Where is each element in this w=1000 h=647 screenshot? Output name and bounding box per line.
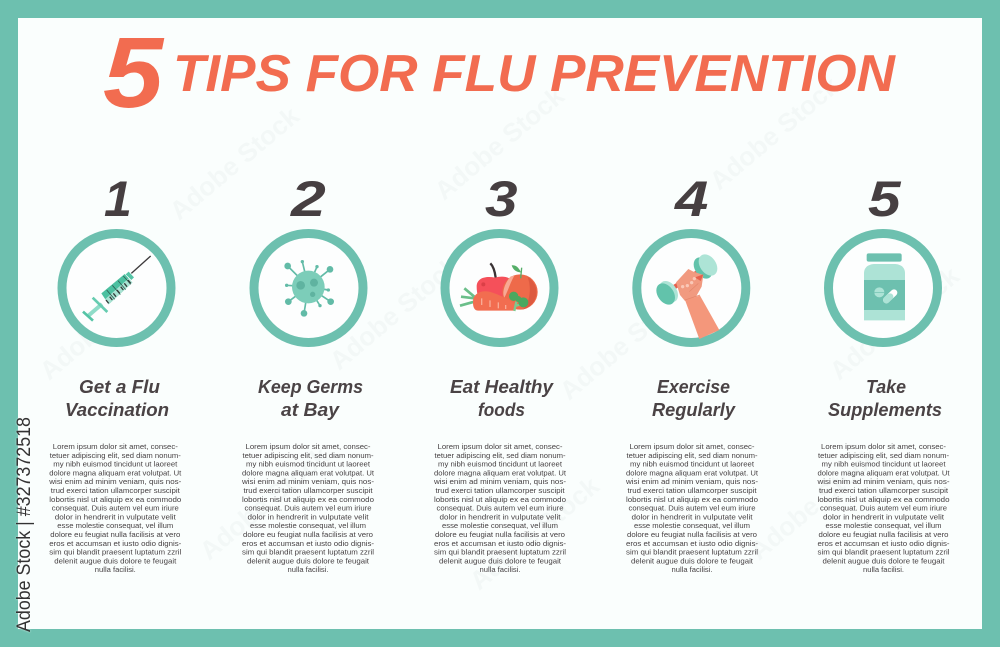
- body text column 4: esse molestie consequat, vel illum: [634, 521, 750, 530]
- body text column 1: esse molestie consequat, vel illum: [57, 521, 173, 530]
- heading 5: Take: [866, 377, 906, 397]
- body text column 2: delenit augue duis dolore te feugait: [247, 556, 370, 565]
- text: Adobe Stock: [164, 100, 305, 226]
- body text column 4: dolor in hendrerit in vulputate velit: [632, 512, 753, 521]
- heading 4: Exercise: [657, 377, 730, 397]
- heading 5: [828, 377, 942, 420]
- text: Adobe Stock: [824, 260, 965, 386]
- circle rings: [62, 234, 938, 342]
- body text column 2: dolor in hendrerit in vulputate velit: [248, 512, 369, 521]
- body text column 3: my nibh euismod tincidunt ut laoreet: [438, 460, 563, 469]
- body text column 1: [48, 442, 182, 574]
- text: Adobe Stock: [34, 260, 175, 386]
- body text column 2: trud exerci tation ullamcorper suscipit: [244, 486, 373, 495]
- body text column 1: dolore eu feugiat nulla facilisis at vero: [50, 530, 180, 539]
- body text column 4: eros et accumsan et iusto odio dignis-: [626, 539, 759, 548]
- icon: dumbbell and arm: [652, 251, 721, 339]
- body text column 2: sim qui blandit praesent luptatum zzril: [242, 548, 374, 557]
- body text column 4: nulla facilisi.: [671, 565, 713, 574]
- body text column 3: lobortis nisl ut aliquip ex ea commodo: [434, 495, 566, 504]
- body text column 4: wisi enim ad minim veniam, quis nos-: [625, 477, 759, 486]
- body text column 4: lobortis nisl ut aliquip ex ea commodo: [626, 495, 758, 504]
- title: [103, 18, 896, 129]
- body text column 1: delenit augue duis dolore te feugait: [54, 556, 177, 565]
- body text column 1: dolore magna aliquam erat volutpat. Ut: [49, 468, 182, 477]
- body text column 5: consequat. Duis autem vel eum iriure: [820, 504, 947, 513]
- body text column 4: delenit augue duis dolore te feugait: [631, 556, 754, 565]
- heading 2: at Bay: [281, 400, 340, 420]
- body text column 5: delenit augue duis dolore te feugait: [822, 556, 945, 565]
- body text column 4: sim qui blandit praesent luptatum zzril: [626, 548, 758, 557]
- body text column 2: [241, 442, 375, 574]
- title text: TIPS FOR FLU PREVENTION: [173, 44, 896, 103]
- heading 3: foods: [478, 400, 525, 420]
- heading 3: [450, 377, 554, 420]
- title number 5: 5: [103, 18, 165, 129]
- body text column 5: [816, 442, 950, 574]
- stock id vertical label: Adobe Stock | #327372518: [12, 417, 34, 632]
- text: Adobe Stock: [429, 80, 570, 206]
- body text column 5: my nibh euismod tincidunt ut laoreet: [821, 460, 946, 469]
- body text column 3: dolor in hendrerit in vulputate velit: [440, 512, 561, 521]
- heading 1: [65, 377, 169, 420]
- body text column 2: dolore magna aliquam erat volutpat. Ut: [242, 468, 375, 477]
- body text column 5: lobortis nisl ut aliquip ex ea commodo: [818, 495, 950, 504]
- body text column 4: Lorem ipsum dolor sit amet, consec-: [630, 442, 755, 451]
- body text column 1: my nibh euismod tincidunt ut laoreet: [53, 460, 178, 469]
- body text column 2: tetuer adipiscing elit, sed diam nonum-: [242, 451, 374, 460]
- body text column 1: Lorem ipsum dolor sit amet, consec-: [53, 442, 178, 451]
- body text column 2: esse molestie consequat, vel illum: [250, 521, 366, 530]
- number 1: 1: [104, 171, 132, 227]
- heading 1: Vaccination: [65, 400, 169, 420]
- body text column 3: delenit augue duis dolore te feugait: [439, 556, 562, 565]
- body text column 1: consequat. Duis autem vel eum iriure: [52, 504, 179, 513]
- body text column 2: consequat. Duis autem vel eum iriure: [244, 504, 372, 513]
- body text column 1: nulla facilisi.: [95, 565, 136, 574]
- body text column 5: Lorem ipsum dolor sit amet, consec-: [821, 442, 947, 451]
- body text column 2: lobortis nisl ut aliquip ex ea commodo: [242, 495, 374, 504]
- number 4: 4: [674, 171, 708, 227]
- icon: virus: [284, 260, 334, 317]
- body text column 5: sim qui blandit praesent luptatum zzril: [818, 548, 950, 557]
- text: Adobe Stock: [194, 440, 335, 566]
- icon: syringe: [83, 256, 151, 321]
- body text column 5: trud exerci tation ullamcorper suscipit: [819, 486, 949, 495]
- number 3: 3: [485, 171, 518, 227]
- heading 3: Eat Healthy: [450, 377, 554, 397]
- body text column 4: consequat. Duis autem vel eum iriure: [628, 504, 756, 513]
- heading 1: Get a Flu: [79, 377, 160, 397]
- body text column 3: trud exerci tation ullamcorper suscipit: [436, 486, 565, 495]
- body text column 1: dolor in hendrerit in vulputate velit: [55, 512, 177, 521]
- body text column 1: tetuer adipiscing elit, sed diam nonum-: [50, 451, 181, 460]
- body text column 3: eros et accumsan et iusto odio dignis-: [434, 539, 567, 548]
- body text column 2: eros et accumsan et iusto odio dignis-: [242, 539, 375, 548]
- body text column 5: esse molestie consequat, vel illum: [826, 521, 942, 530]
- body text column 2: wisi enim ad minim veniam, quis nos-: [241, 477, 375, 486]
- body text column 3: sim qui blandit praesent luptatum zzril: [434, 548, 566, 557]
- text: Adobe Stock: [744, 440, 885, 566]
- heading 4: Regularly: [652, 400, 736, 420]
- body text column 2: dolore eu feugiat nulla facilisis at vero: [243, 530, 373, 539]
- text: Adobe Stock: [324, 250, 465, 376]
- text: Adobe Stock: [464, 470, 605, 596]
- text: Adobe Stock: [704, 70, 845, 196]
- body text column 3: consequat. Duis autem vel eum iriure: [436, 504, 564, 513]
- body text column 3: tetuer adipiscing elit, sed diam nonum-: [434, 451, 566, 460]
- body text column 1: lobortis nisl ut aliquip ex ea commodo: [49, 495, 181, 504]
- heading 5: Supplements: [828, 400, 942, 420]
- body text column 3: nulla facilisi.: [479, 565, 521, 574]
- body text column 3: esse molestie consequat, vel illum: [442, 521, 558, 530]
- body text column 5: dolor in hendrerit in vulputate velit: [823, 512, 945, 521]
- body text column 3: Lorem ipsum dolor sit amet, consec-: [438, 442, 563, 451]
- body text column 1: eros et accumsan et iusto odio dignis-: [49, 539, 182, 548]
- body text column 3: dolore eu feugiat nulla facilisis at vero: [435, 530, 565, 539]
- body text column 5: eros et accumsan et iusto odio dignis-: [818, 539, 950, 548]
- body text column 2: my nibh euismod tincidunt ut laoreet: [246, 460, 371, 469]
- body text column 5: tetuer adipiscing elit, sed diam nonum-: [818, 451, 950, 460]
- numbers: [104, 171, 901, 227]
- heading 2: [258, 377, 363, 420]
- body text column 1: trud exerci tation ullamcorper suscipit: [51, 486, 181, 495]
- heading 2: Keep Germs: [258, 377, 363, 397]
- icon: supplement bottle: [864, 253, 905, 320]
- headings: [65, 377, 942, 420]
- body text column 3: wisi enim ad minim veniam, quis nos-: [433, 477, 567, 486]
- heading 4: [652, 377, 736, 420]
- body text column 3: [433, 442, 567, 574]
- body text column 1: wisi enim ad minim veniam, quis nos-: [48, 477, 182, 486]
- body text column 5: nulla facilisi.: [863, 565, 904, 574]
- body text column 4: tetuer adipiscing elit, sed diam nonum-: [626, 451, 758, 460]
- stock id vertical label: Adobe Stock | #327372518: [12, 417, 34, 632]
- body text column 4: [625, 442, 759, 574]
- body text column 4: dolore magna aliquam erat volutpat. Ut: [626, 468, 759, 477]
- number 2: 2: [290, 171, 326, 227]
- body text column 2: Lorem ipsum dolor sit amet, consec-: [246, 442, 371, 451]
- text: Adobe Stock: [554, 280, 695, 406]
- body text column 1: sim qui blandit praesent luptatum zzril: [49, 548, 182, 557]
- body text column 5: dolore eu feugiat nulla facilisis at vero: [818, 530, 948, 539]
- body text column 4: dolore eu feugiat nulla facilisis at vero: [627, 530, 757, 539]
- body text column 4: my nibh euismod tincidunt ut laoreet: [630, 460, 755, 469]
- body text column 2: nulla facilisi.: [287, 565, 329, 574]
- body text column 3: dolore magna aliquam erat volutpat. Ut: [434, 468, 567, 477]
- body text column 4: trud exerci tation ullamcorper suscipit: [628, 486, 757, 495]
- number 5: 5: [868, 171, 901, 227]
- body text column 5: wisi enim ad minim veniam, quis nos-: [816, 477, 950, 486]
- body text column 5: dolore magna aliquam erat volutpat. Ut: [818, 468, 950, 477]
- icon: healthy food: [460, 263, 538, 311]
